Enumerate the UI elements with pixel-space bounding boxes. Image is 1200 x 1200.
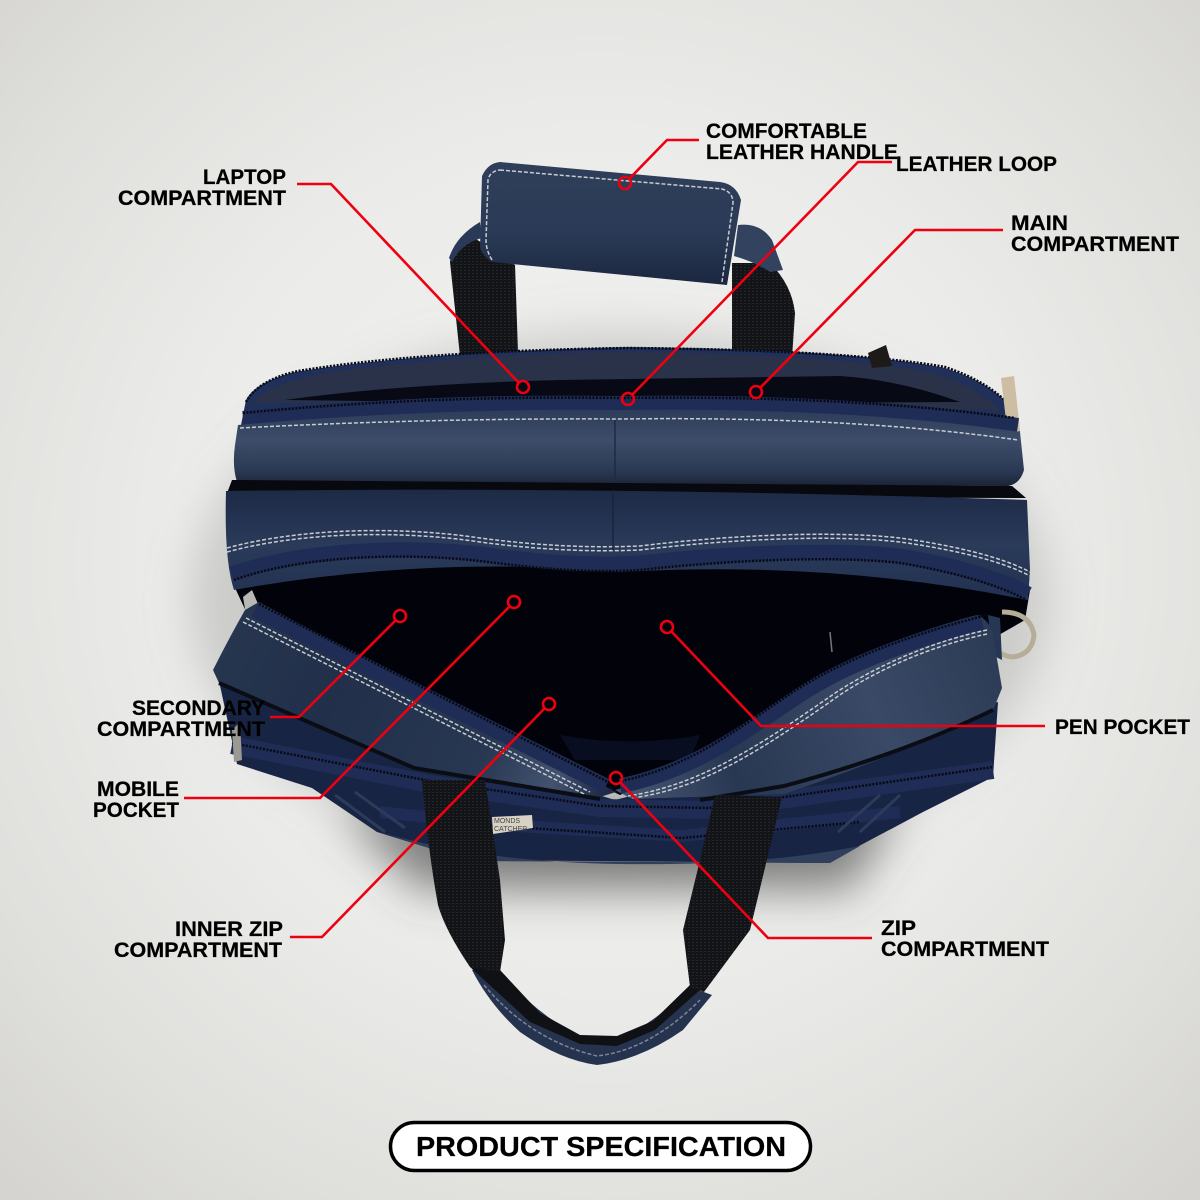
top leather panel: [234, 410, 1024, 486]
callout: leather loop: [622, 153, 1057, 405]
callout: main compartment: COMPARTMENT: [1011, 233, 1179, 256]
callout: secondary compartment: COMPARTMENT: [97, 718, 265, 741]
title badge: PRODUCT SPECIFICATION: [416, 1131, 786, 1162]
callout: inner zip compartment: INNER ZIP: [175, 918, 283, 941]
bottom body layers: [219, 681, 998, 864]
callout: laptop compartment: LAPTOP: [203, 166, 286, 189]
callout: main compartment: [750, 212, 1179, 398]
zip pull and fabric tag: [868, 345, 1020, 436]
top handle straps: [449, 222, 795, 358]
bottom handle: [422, 780, 782, 1065]
callout: comfortable leather handle: COMFORTABLE: [706, 120, 867, 143]
callout: inner zip compartment: [114, 698, 555, 962]
callout: main compartment: MAIN: [1011, 212, 1068, 235]
callout: zip compartment: ZIP: [881, 917, 916, 940]
right front flap: [615, 615, 1002, 800]
brand tag: [492, 815, 533, 834]
middle leather panel: [226, 490, 1030, 600]
callout: pen pocket: PEN POCKET: [1055, 716, 1190, 739]
bag illustration: [213, 162, 1034, 1065]
mid black seam: [226, 480, 1026, 498]
left buckle: [243, 590, 258, 615]
callout: leather loop: LEATHER LOOP: [896, 153, 1057, 176]
callout: secondary compartment: [97, 610, 406, 741]
callout: mobile pocket: MOBILE: [97, 778, 179, 801]
callout: mobile pocket: [93, 596, 520, 822]
callout: zip compartment: COMPARTMENT: [881, 938, 1049, 961]
title badge: [390, 1122, 810, 1170]
callout: comfortable leather handle: LEATHER HANDLE: [706, 141, 898, 164]
callout: secondary compartment: SECONDARY: [132, 697, 265, 720]
side ring: [988, 612, 1034, 660]
callout: laptop compartment: COMPARTMENT: [118, 187, 286, 210]
brand tag: MONDS: [494, 818, 520, 825]
inner lining details: [560, 632, 832, 760]
callout: laptop compartment: [118, 166, 529, 393]
comfortable leather handle grip: [480, 162, 741, 285]
brand tag: CATCHER: [494, 826, 527, 833]
callout: comfortable leather handle: [619, 120, 898, 189]
callout: pen pocket: [661, 621, 1190, 739]
main interior: [232, 550, 1030, 795]
bag shadow: [190, 330, 1050, 890]
callout: mobile pocket: POCKET: [93, 799, 179, 822]
callout: zip compartment: [610, 772, 1049, 961]
left front flap: [213, 602, 616, 799]
top compartment opening: [241, 347, 1020, 432]
callout: inner zip compartment: COMPARTMENT: [114, 939, 282, 962]
top zip: [243, 403, 1018, 425]
